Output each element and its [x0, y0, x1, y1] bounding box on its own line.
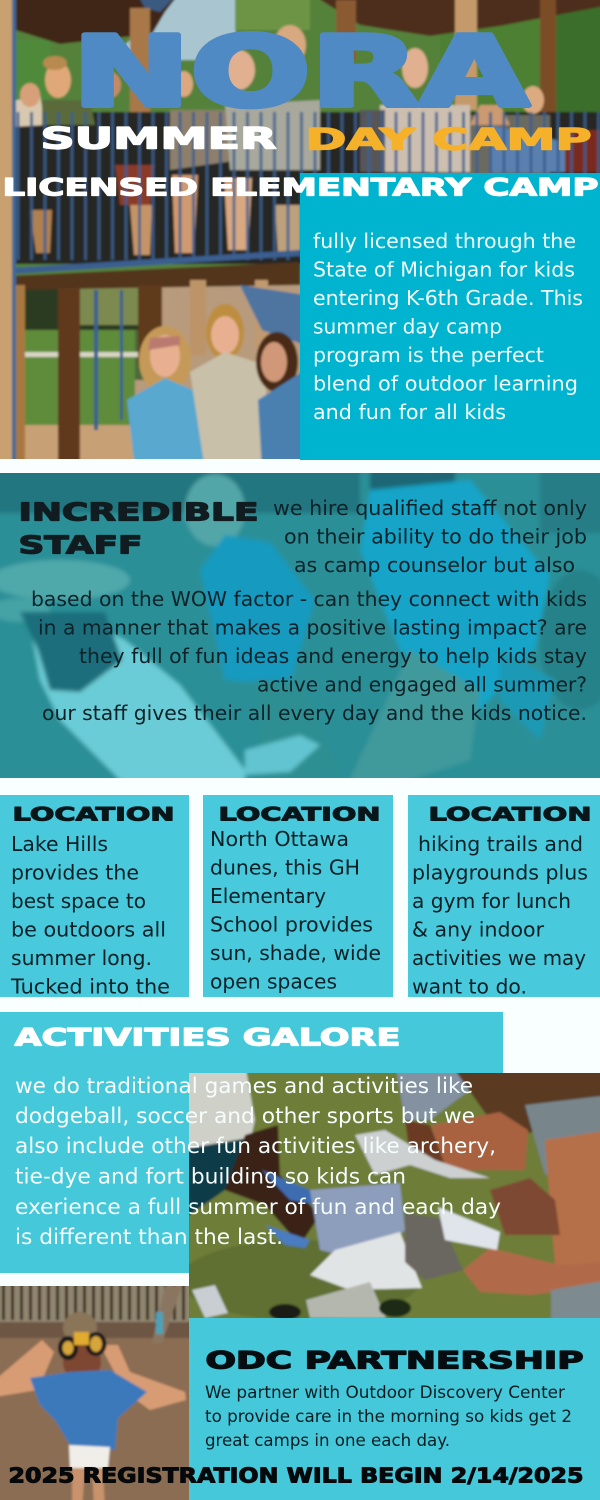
- playground kids upper bodies: [0, 25, 600, 255]
- location text 2: Elementary: [210, 884, 326, 908]
- location text 1: best space to: [11, 889, 146, 913]
- panel: activities galore background: [0, 1012, 503, 1273]
- staff paragraph: [31, 496, 587, 725]
- subtitle: summer: SUMMER: [40, 121, 276, 155]
- location heading 3: LOCATION: [428, 804, 592, 826]
- activities paragraph: tie-dye and fort building so kids can: [15, 1164, 406, 1188]
- staff paragraph: as camp counselor but also: [294, 553, 575, 577]
- location text 1: Lake Hills: [11, 832, 108, 856]
- photo: kids on playground with counselors: [0, 0, 600, 470]
- counselors: [127, 304, 305, 470]
- location text 3: [412, 832, 588, 998]
- ODC heading: ODC PARTNERSHIP: [206, 1346, 584, 1374]
- activities paragraph: is different than the last.: [15, 1225, 283, 1249]
- location text 3: playgrounds plus: [412, 860, 588, 884]
- activities paragraph: we do traditional games and activities like: [15, 1074, 473, 1098]
- heading: activities galore: ACTIVITIES GALORE: [14, 1023, 400, 1051]
- location heading 1: LOCATION: [12, 804, 174, 826]
- panel: location Lake Hills: [0, 795, 189, 998]
- photo: child with binoculars in forest: [0, 1276, 199, 1500]
- location text 3: a gym for lunch: [412, 889, 571, 913]
- footer: registration date: 2025 REGISTRATION WILL BEGIN 2/14/2025: [8, 1464, 584, 1488]
- location text 1: provides the: [11, 860, 139, 884]
- heading: incredible staff: [18, 497, 258, 559]
- location text 2: dunes, this GH: [210, 856, 360, 880]
- location text 2: School provides: [210, 912, 373, 936]
- ODC paragraph: We partner with Outdoor Discovery Center: [205, 1382, 565, 1402]
- ODC paragraph: to provide care in the morning so kids get 2: [205, 1406, 572, 1426]
- location text 3: activities we may: [412, 946, 586, 970]
- panel: licensed intro: [300, 173, 600, 460]
- location text 1: be outdoors all: [11, 918, 166, 942]
- location text 1: Tucked into the: [10, 974, 170, 998]
- heading: licensed elementary camp: LICENSED ELEMENTARY CAMP: [2, 173, 598, 201]
- location text 2: North Ottawa: [210, 827, 349, 851]
- intro paragraph: program is the perfect: [313, 343, 544, 367]
- location text 3: want to do.: [412, 974, 527, 998]
- location text 3: & any indoor: [412, 918, 545, 942]
- staff paragraph: our staff gives their all every day and the kids notice.: [42, 701, 587, 725]
- ODC paragraph: great camps in one each day.: [205, 1430, 450, 1450]
- activities paragraph: exerience a full summer of fun and each day: [15, 1195, 501, 1219]
- panel: ODC partnership: [189, 1318, 600, 1500]
- intro paragraph: and fun for all kids: [313, 400, 506, 424]
- panel: location hiking trails: [408, 795, 600, 998]
- staff paragraph: active and engaged all summer?: [257, 672, 587, 696]
- activities paragraph: also include other fun activities like archery,: [15, 1134, 496, 1158]
- intro paragraph: blend of outdoor learning: [313, 372, 578, 396]
- location text 3: hiking trails and: [418, 832, 583, 856]
- panel: location North Ottawa: [203, 795, 393, 997]
- location text 2: sun, shade, wide: [210, 941, 381, 965]
- staff paragraph: they full of fun ideas and energy to help kids stay: [79, 644, 587, 668]
- intro paragraph: State of Michigan for kids: [313, 258, 575, 282]
- staff paragraph: based on the WOW factor - can they connect with kids: [31, 587, 587, 611]
- activities paragraph: [15, 1074, 501, 1249]
- location text 1: [10, 832, 170, 998]
- intro paragraph: summer day camp: [313, 314, 502, 338]
- subtitle: day camp: DAY CAMP: [306, 122, 592, 156]
- heading: incredible staff: STAFF: [18, 530, 142, 559]
- title: NORA: NORA: [72, 16, 529, 128]
- staff paragraph: in a manner that makes a positive lasting impact? are: [38, 616, 587, 640]
- location heading 2: LOCATION: [218, 804, 380, 826]
- location text 2: open spaces: [210, 970, 337, 994]
- staff paragraph: we hire qualified staff not only: [273, 496, 587, 520]
- photo: tie-dye activity on grass: [179, 1063, 600, 1328]
- ODC paragraph: [205, 1382, 572, 1450]
- intro paragraph: [313, 229, 583, 424]
- staff paragraph: on their ability to do their job: [284, 524, 587, 548]
- activities paragraph: dodgeball, soccer and other sports but we: [15, 1104, 475, 1128]
- heading: incredible staff: INCREDIBLE: [18, 497, 258, 526]
- location text 2: [210, 827, 381, 994]
- photo: staff with goat, teal tint: [0, 463, 600, 790]
- location text 1: summer long.: [11, 946, 152, 970]
- intro paragraph: fully licensed through the: [313, 229, 576, 253]
- intro paragraph: entering K-6th Grade. This: [313, 286, 583, 310]
